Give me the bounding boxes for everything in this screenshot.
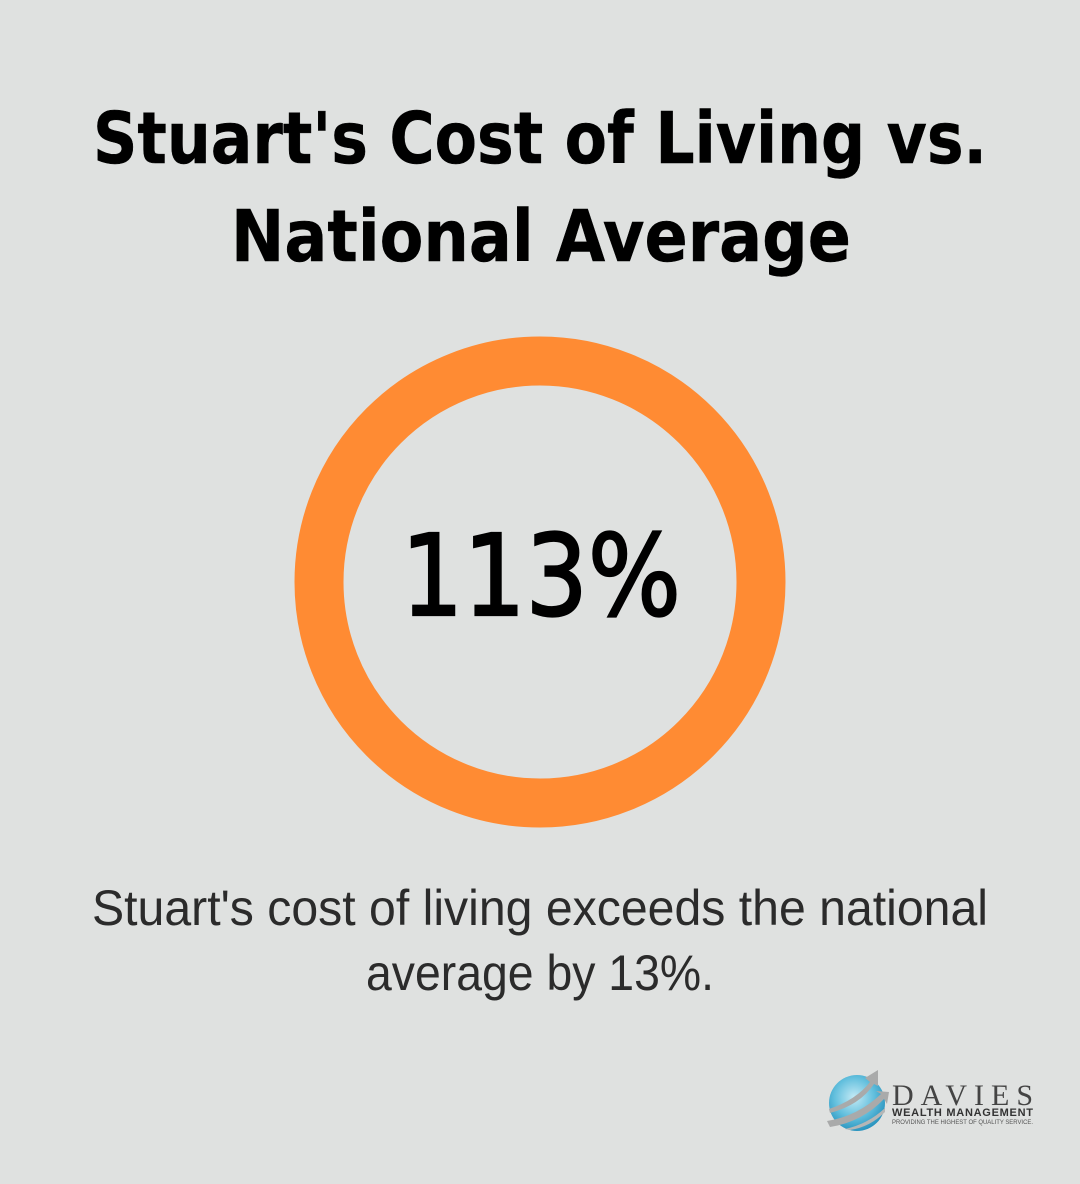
title <box>93 97 987 278</box>
description text: average by 13%. <box>366 945 714 1001</box>
title: National Average <box>231 195 851 278</box>
icon: globe with arrows <box>827 1070 889 1131</box>
description text: Stuart's cost of living exceeds the national <box>92 880 988 936</box>
logo tagline: PROVIDING THE HIGHEST OF QUALITY SERVICE. <box>892 1119 1033 1126</box>
logo wordmark: DAVIES <box>892 1079 1033 1112</box>
logo subtitle: WEALTH MANAGEMENT <box>892 1107 1033 1119</box>
donut ring <box>319 361 761 803</box>
logo: Davies Wealth Management <box>827 1070 1033 1131</box>
big number: 113%: 113% <box>401 512 681 642</box>
description text <box>92 880 988 1001</box>
